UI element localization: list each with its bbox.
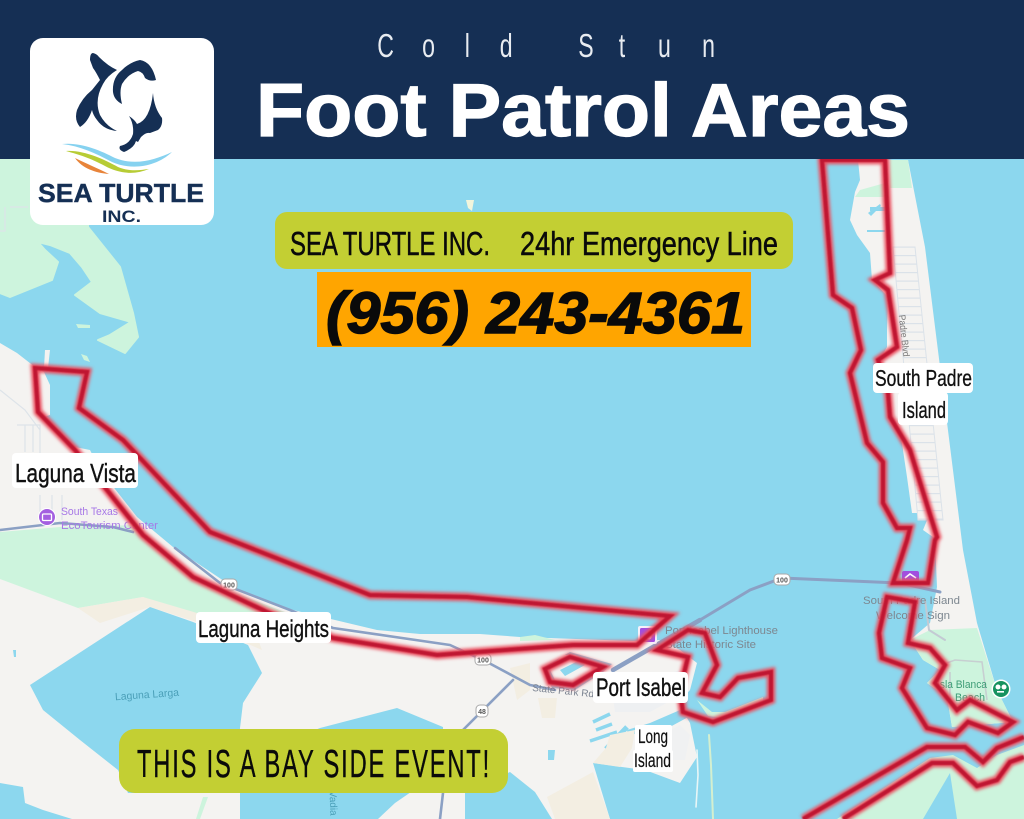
callout: bay side event [119,729,508,793]
map: place names: Welcome Sign [876,610,950,622]
emergency line banner [275,212,793,269]
map: place names: Beach [955,692,985,704]
map: lagoons and canals [0,204,957,819]
map: place names: Isla Blanca [937,679,988,691]
label: Long Island: Island [634,751,671,772]
icon: waves [62,144,172,174]
icon: EcoTourism Center pin [38,508,56,526]
map: street grids [0,207,987,760]
map: tan parcels and small greens [196,635,763,819]
map: roads [0,523,945,819]
logo wordmark: SEA TURTLE [38,178,204,208]
logo wordmark: Inc.: INC. [102,207,141,226]
map: route shields [221,574,790,717]
map: place names: Vadia [327,791,338,816]
map: route shields: 48 [478,709,486,716]
map: place names: South Texas [61,506,118,518]
map: place names: State Historic Site [665,639,756,651]
header band [0,0,1024,159]
label: South Padre Island: South Padre [875,365,972,391]
label: Laguna Vista: Laguna Vista [15,458,136,488]
icon: turtle [76,53,162,152]
emergency line banner: SEA TURTLE INC. [290,225,490,262]
phone number box: (956) 243-4361 [326,281,745,346]
map: place names: State Park Rd [532,683,594,700]
subtitle: Cold Stun: Cold Stun [377,28,715,65]
map: route shields: 100 [223,582,235,590]
label: South Padre Island: Island [902,397,946,423]
label: Long Island: Long [638,727,668,748]
label: Laguna Heights: Laguna Heights [198,616,329,643]
map: place names: South Padre Island [863,595,960,607]
title: Foot Patrol Areas: Foot Patrol Areas [256,68,910,152]
map: marina canals [590,714,627,749]
label: Long Island [633,725,673,772]
callout: bay side event: THIS IS A BAY SIDE EVENT! [137,743,491,786]
icon: Lighthouse pin [638,626,657,644]
map: place names: EcoTourism Center [61,520,158,532]
label: Port Isabel [593,672,688,703]
map: route shields: 100 [776,578,788,584]
patrol areas: red outlines [35,160,1024,819]
map: place names: Padre Blvd [896,314,911,357]
map: place names: Port Isabel Lighthouse [665,625,778,637]
emergency line banner: 24hr Emergency Line [520,225,778,262]
map: place names: Laguna Larga [115,687,179,703]
label: South Padre Island [873,363,973,425]
label: Port Isabel: Port Isabel [596,674,686,702]
label: Laguna Heights [196,612,331,643]
icon: South Padre welcome pin [902,571,919,583]
map: jetties [696,735,713,819]
logo: Sea Turtle Inc. [30,38,214,226]
map: place names [61,314,988,816]
map: route shields: 100 [477,658,489,664]
north island land [850,160,1013,727]
icon: beach park pin [992,680,1010,698]
